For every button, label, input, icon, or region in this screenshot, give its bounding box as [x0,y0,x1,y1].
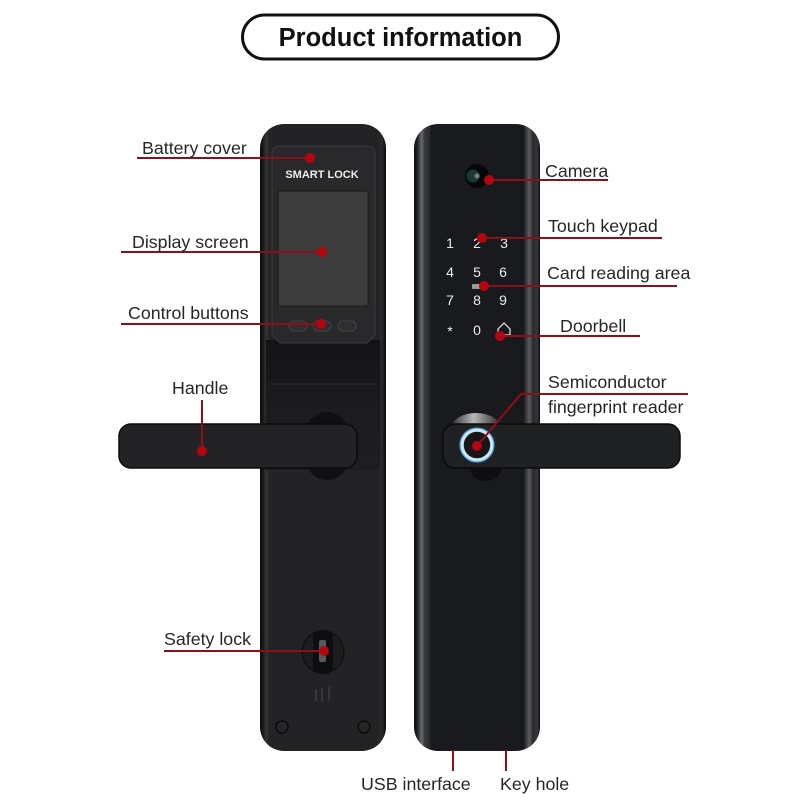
callout: camera: Camera [545,161,608,181]
control button keys [289,321,356,331]
doorbell icon [498,323,510,335]
front body [414,124,540,751]
callout: doorbell [495,316,640,341]
callout: safety lock: Safety lock [164,629,251,649]
keypad digits: 0 [473,322,481,338]
callout: touch keypad: Touch keypad [548,216,658,236]
keypad digits: 3 [500,235,508,251]
callout: key hole: Key hole [500,774,569,794]
callout: camera [484,161,608,185]
callout: display screen [121,232,327,257]
front handle knob [452,413,501,481]
keypad digits: 2 [473,235,481,251]
panel: front of lock [414,124,540,751]
keypad digits: 7 [446,292,454,308]
back body [260,124,386,751]
right handle with fingerprint reader [443,424,680,468]
callout: handle [172,378,228,456]
callout: semiconductor fingerprint reader: fingerprint reader [548,397,683,417]
callout: card reading area [479,263,690,291]
keypad digits: 1 [446,235,454,251]
callout: doorbell: Doorbell [560,316,626,336]
title [242,15,558,59]
panel: back of lock [260,124,386,751]
callout: semiconductor fingerprint reader [472,372,688,451]
back handle knob [301,412,353,480]
callout: handle: Handle [172,378,228,398]
keypad digits: 8 [473,292,481,308]
callout: battery cover: Battery cover [142,138,247,158]
safety lock knob [302,630,344,674]
keypad digits: 4 [446,264,454,280]
display screen [278,191,368,306]
title: Product information [279,24,522,52]
keypad digits [446,235,508,339]
keypad digits: 9 [499,292,507,308]
callout: display screen: Display screen [132,232,249,252]
back upper faceplate [272,146,375,343]
vent marks [316,687,329,702]
keypad digits: 6 [499,264,507,280]
callout: battery cover [137,138,315,163]
brand text: SMART LOCK [285,169,359,181]
callout: key hole [500,750,569,794]
callout: touch keypad [477,216,662,243]
card reader mark [472,284,480,289]
back neck shadow [266,340,380,470]
fingerprint ring [462,430,492,460]
left handle [119,424,357,468]
callout: USB interface [361,750,471,794]
callout: control buttons [121,303,326,329]
callout: USB interface: USB interface [361,774,471,794]
lower seam [268,383,378,385]
camera [465,164,489,188]
callout: card reading area: Card reading area [547,263,690,283]
callout: control buttons: Control buttons [128,303,249,323]
keypad digits: 5 [473,264,481,280]
callout: safety lock [164,629,329,656]
callout: semiconductor fingerprint reader: Semiconductor [548,372,667,392]
keypad digits: * [447,323,453,339]
screws [276,721,370,733]
